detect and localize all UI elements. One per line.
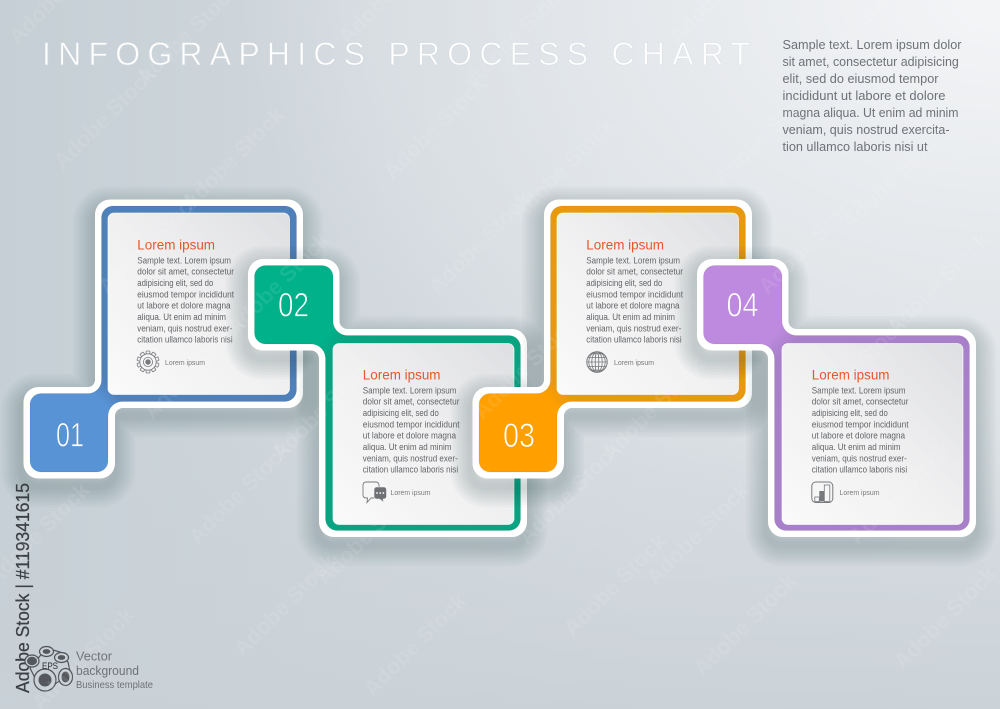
panel: step 04 purple xyxy=(696,259,976,545)
body text 04: dolor sit amet, consectetur xyxy=(812,397,908,407)
body text 04: veniam, quis nostrud exer- xyxy=(812,453,907,463)
watermarks: Adobe Stock xyxy=(641,477,755,590)
shadow 03 xyxy=(472,208,751,486)
body text 01: aliqua. Ut enim ad minim xyxy=(137,312,226,322)
watermarks: Adobe Stock xyxy=(843,436,957,549)
watermarks: Adobe Stock xyxy=(183,436,297,549)
inner panel 02 xyxy=(333,344,514,524)
body text 01: Sample text. Lorem ipsum xyxy=(137,255,231,265)
body text 03: eiusmod tempor incididunt xyxy=(586,289,683,299)
intro text block xyxy=(782,38,962,154)
icon: EPS logo: EPS xyxy=(42,661,58,671)
white frame 01 xyxy=(24,200,303,478)
intro text block: sit amet, consectetur adipisicing xyxy=(782,55,959,69)
stock id vertical text: Adobe Stock | #119341615 xyxy=(13,483,33,693)
watermarks: Adobe Stock xyxy=(688,568,802,681)
watermarks: Adobe Stock xyxy=(881,227,995,340)
icon label 04: Lorem ipsum xyxy=(840,488,880,497)
watermarks: Adobe Stock xyxy=(558,528,672,641)
intro text block: veniam, quis nostrud exercita- xyxy=(782,123,950,137)
watermarks: Adobe Stock xyxy=(468,311,582,424)
icon: bar chart xyxy=(812,482,833,502)
body text 04: eiusmod tempor incididunt xyxy=(812,419,909,429)
icon: EPS logo xyxy=(25,646,72,691)
white frame 04 xyxy=(697,259,976,537)
intro text block: incididunt ut labore et dolore xyxy=(782,89,946,103)
intro text block: magna aliqua. Ut enim ad minim xyxy=(782,106,958,120)
shadow 02 xyxy=(247,267,526,545)
body text 03: veniam, quis nostrud exer- xyxy=(586,323,681,333)
watermarks: Adobe Stock xyxy=(798,311,912,424)
title: INFOGRAPHICS PROCESS CHART xyxy=(42,36,750,72)
body text 01: dolor sit amet, consectetur xyxy=(137,267,234,277)
number 03: 03 xyxy=(503,417,535,455)
icon: gear xyxy=(137,351,159,373)
watermarks: Adobe Stock xyxy=(266,352,380,465)
icon label 01: Lorem ipsum xyxy=(165,358,205,367)
white frame 03 xyxy=(472,200,752,478)
body text 01: citation ullamco laboris nisi xyxy=(137,335,233,345)
watermarks: Adobe Stock xyxy=(888,561,1000,674)
number 01: 01 xyxy=(56,416,84,454)
body text 02: aliqua. Ut enim ad minim xyxy=(363,442,452,452)
body text 03: dolor sit amet, consectetur xyxy=(586,267,683,277)
green band and badge 02 xyxy=(254,266,520,530)
watermarks: Adobe Stock xyxy=(551,227,665,340)
footer caption: Business template xyxy=(76,679,153,691)
watermarks: Adobe Stock xyxy=(753,186,867,299)
watermarks: Adobe Stock xyxy=(596,352,710,465)
orange band and badge 03 xyxy=(479,206,746,472)
watermarks: Adobe Stock xyxy=(708,78,822,191)
body text 01: ut labore et dolore magna xyxy=(137,301,231,311)
watermarks: Adobe Stock xyxy=(221,227,335,340)
panel: step 02 green xyxy=(247,259,527,545)
footer caption: Vector xyxy=(76,648,113,664)
intro text block: elit, sed do eiusmod tempor xyxy=(782,72,938,86)
number 02: 02 xyxy=(278,287,309,325)
heading 03: Lorem ipsum xyxy=(586,237,664,252)
body text 04: citation ullamco laboris nisi xyxy=(812,465,907,475)
body text 04: ut labore et dolore magna xyxy=(812,431,905,441)
panel: step 01 blue xyxy=(22,200,303,486)
watermarks: Adobe Stock xyxy=(378,71,492,184)
body text 02: Sample text. Lorem ipsum xyxy=(363,385,456,395)
watermarks: Adobe Stock xyxy=(513,436,627,549)
heading 04: Lorem ipsum xyxy=(812,367,890,382)
body text 02 xyxy=(363,385,460,475)
watermarks: Adobe Stock xyxy=(423,186,537,299)
intro text block: tion ullamco laboris nisi ut xyxy=(782,140,928,154)
body text 02: veniam, quis nostrud exer- xyxy=(363,453,458,463)
watermarks: Adobe Stock xyxy=(176,102,290,215)
body text 03: adipisicing elit, sed do xyxy=(586,278,662,288)
purple band and badge 04 xyxy=(704,266,970,530)
intro text block: Sample text. Lorem ipsum dolor xyxy=(782,38,962,52)
shadow 04 xyxy=(696,267,975,545)
text group 02 xyxy=(363,367,460,497)
text group 04 xyxy=(812,367,909,497)
body text 03: Sample text. Lorem ipsum xyxy=(586,255,680,265)
body text 02: adipisicing elit, sed do xyxy=(363,408,439,418)
body text 04: adipisicing elit, sed do xyxy=(812,408,888,418)
watermarks: Adobe Stock xyxy=(506,112,620,225)
icon label 02: Lorem ipsum xyxy=(390,488,430,497)
icon label 03: Lorem ipsum xyxy=(614,358,654,367)
icon: globe xyxy=(587,352,607,372)
footer caption xyxy=(76,648,153,691)
footer caption: background xyxy=(76,663,139,678)
watermarks: Adobe Stock xyxy=(358,588,472,701)
icon: chat bubbles xyxy=(363,482,386,502)
body text 04 xyxy=(812,385,909,475)
body text 03: ut labore et dolore magna xyxy=(586,301,680,311)
panel: step 03 orange xyxy=(472,200,752,486)
heading 02: Lorem ipsum xyxy=(363,367,440,382)
body text 01: veniam, quis nostrud exer- xyxy=(137,323,232,333)
watermarks: Adobe Stock xyxy=(228,548,342,661)
body text 03: aliqua. Ut enim ad minim xyxy=(586,312,675,322)
body text 03 xyxy=(586,255,683,345)
watermarks: Adobe Stock xyxy=(48,61,162,174)
body text 02: eiusmod tempor incididunt xyxy=(363,419,460,429)
watermarks: Adobe Stock xyxy=(311,477,425,590)
body text 01: eiusmod tempor incididunt xyxy=(137,289,234,299)
number 04: 04 xyxy=(726,287,758,325)
body text 02: citation ullamco laboris nisi xyxy=(363,465,458,475)
watermarks: Adobe Stock xyxy=(836,122,950,235)
body text 02: dolor sit amet, consectetur xyxy=(363,397,460,407)
body text 01: adipisicing elit, sed do xyxy=(137,278,213,288)
body text 03: citation ullamco laboris nisi xyxy=(586,335,682,345)
body text 01 xyxy=(137,255,234,345)
body text 02: ut labore et dolore magna xyxy=(363,431,456,441)
body text 04: aliqua. Ut enim ad minim xyxy=(812,442,900,452)
body text 04: Sample text. Lorem ipsum xyxy=(812,385,906,395)
inner panel 03 xyxy=(557,213,738,394)
inner panel 01 xyxy=(108,213,290,394)
white frame 02 xyxy=(248,259,527,537)
blue band and badge 01 xyxy=(30,206,296,472)
watermarks: Adobe Stock xyxy=(93,186,207,299)
inner panel 04 xyxy=(782,344,963,524)
watermarks: Adobe Stock xyxy=(138,311,252,424)
heading 01: Lorem ipsum xyxy=(137,237,215,252)
shadow 01 xyxy=(22,208,302,486)
